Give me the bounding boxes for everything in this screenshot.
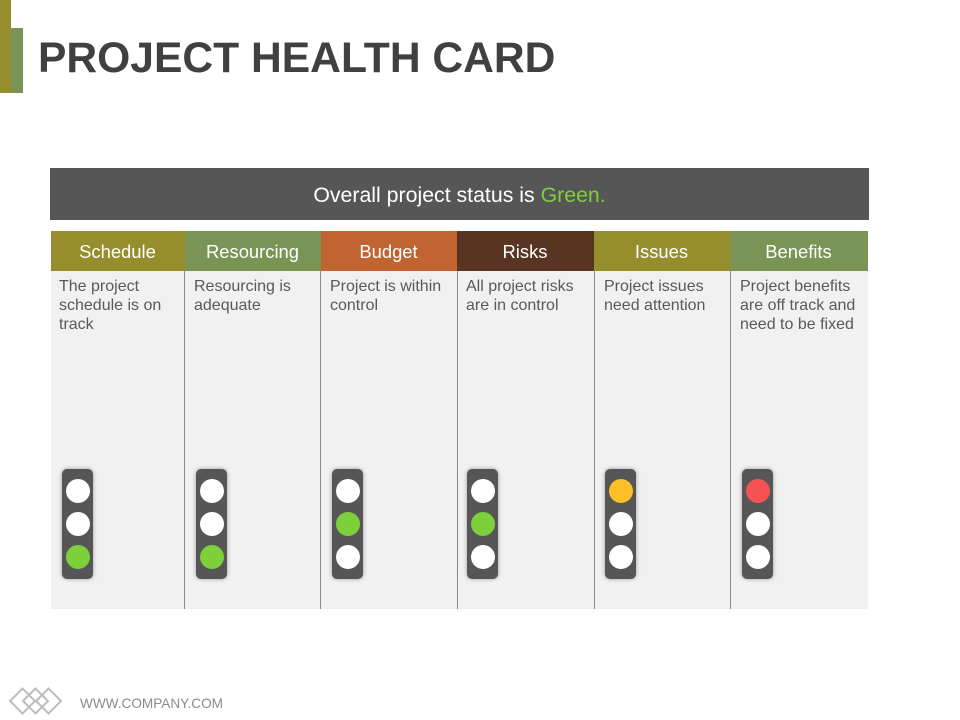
- column separators: [184, 271, 731, 609]
- traffic light: issues amber: [605, 469, 636, 579]
- header: Risks: Risks: [503, 241, 547, 262]
- text: issues status: need attention: [604, 297, 705, 314]
- text: issues status: Project issues: [604, 278, 704, 295]
- traffic light: budget green: [332, 469, 363, 579]
- text: benefits status: [740, 278, 855, 333]
- header: Resourcing: Resourcing: [206, 241, 299, 262]
- text: budget status: control: [330, 297, 378, 314]
- table panel: [51, 231, 868, 609]
- overall status banner: Overall project status is Green.: [313, 183, 606, 207]
- header: Issues: Issues: [635, 241, 688, 262]
- header: Resourcing: [185, 231, 321, 271]
- header: Budget: Budget: [359, 241, 418, 262]
- text: resourcing status: [194, 278, 291, 314]
- header: Risks: [457, 231, 594, 271]
- header: Issues: [594, 231, 730, 271]
- text: benefits status: are off track and: [740, 297, 855, 314]
- text: risks status: [466, 278, 574, 314]
- text: benefits status: need to be fixed: [740, 316, 854, 333]
- traffic light: resourcing green: [196, 469, 227, 579]
- traffic light: benefits red: [742, 469, 773, 579]
- accent bars: [0, 0, 23, 93]
- footer website: WWW.COMPANY.COM: [80, 696, 223, 711]
- header: Schedule: Schedule: [79, 241, 156, 262]
- text: budget status: [330, 278, 441, 314]
- text: schedule status: track: [59, 316, 94, 333]
- header: Schedule: [51, 231, 185, 271]
- header: Benefits: [730, 231, 868, 271]
- text: schedule status: The project: [59, 278, 139, 295]
- header: Benefits: Benefits: [765, 241, 832, 262]
- text: risks status: All project risks: [466, 278, 574, 295]
- overall status banner: [50, 168, 869, 220]
- text: schedule status: schedule is on: [59, 297, 161, 314]
- text: budget status: Project is within: [330, 278, 441, 295]
- text: issues status: [604, 278, 705, 314]
- text: resourcing status: adequate: [194, 297, 261, 314]
- text: benefits status: Project benefits: [740, 278, 850, 295]
- icon: company logo diamonds: [9, 687, 62, 715]
- text: schedule status: [59, 278, 161, 333]
- text: risks status: are in control: [466, 297, 558, 314]
- traffic light: schedule green: [62, 469, 93, 579]
- header: Budget: [321, 231, 457, 271]
- traffic light: risks green: [467, 469, 498, 579]
- title: PROJECT HEALTH CARD: [38, 34, 555, 82]
- text: resourcing status: Resourcing is: [194, 278, 291, 295]
